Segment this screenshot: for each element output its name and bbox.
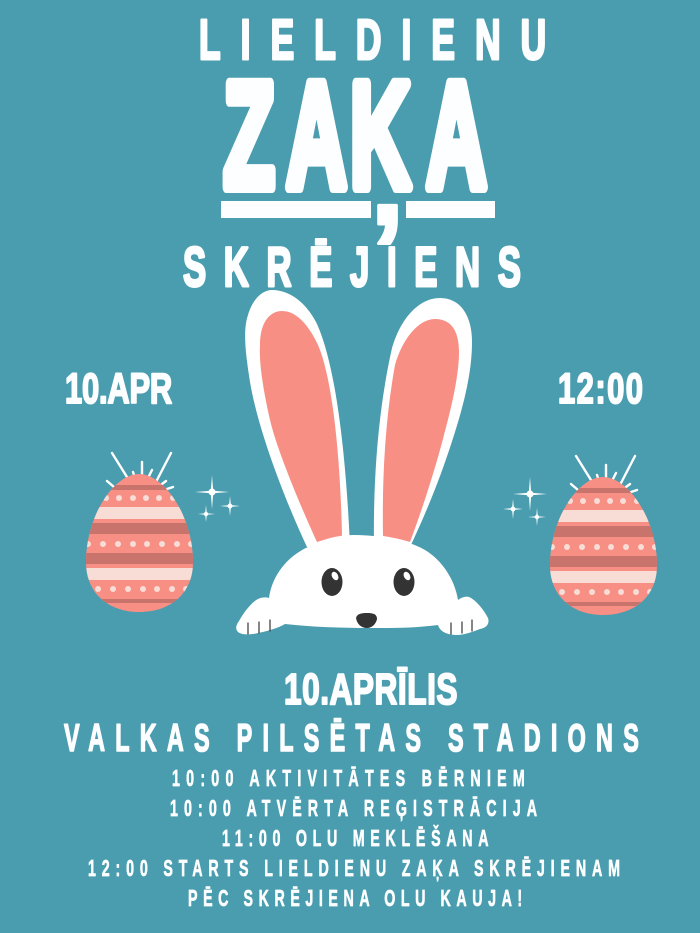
eyes (322, 568, 414, 596)
right ear (374, 298, 472, 547)
title: LIELDIENU: LIELDIENU (199, 9, 546, 72)
title underline with comma: , (370, 112, 405, 251)
egg rays (107, 453, 173, 489)
title: ZAKA: ZAKA (223, 51, 487, 219)
left ear (245, 290, 350, 547)
head and paws (236, 535, 489, 635)
schedule (88, 767, 620, 912)
icon: left egg (85, 453, 194, 612)
egg body (549, 477, 658, 615)
schedule line 1: 10:00 AKTIVITĀTES BĒRNIEM (172, 767, 525, 792)
title: SKRĒJIENS: SKRĒJIENS (183, 236, 521, 298)
nose (356, 613, 377, 628)
schedule line 2: 10:00 ATVĒRTA REĢISTRĀCIJA (170, 797, 537, 822)
claws (248, 620, 472, 634)
date label: 10.APR (65, 364, 172, 412)
icon: bunny (236, 290, 489, 635)
icon: right sparkles (503, 477, 547, 526)
title underline with comma (221, 112, 495, 251)
schedule line 4: 12:00 STARTS LIELDIENU ZAĶA SKRĒJIENAM (88, 857, 620, 882)
egg body (85, 474, 194, 612)
icon: right egg (549, 456, 658, 615)
time label: 12:00 (558, 364, 643, 412)
schedule line 5: PĒC SKRĒJIENA OLU KAUJA! (188, 887, 522, 912)
event date: 10.APRĪLIS (284, 665, 458, 714)
egg rays (571, 456, 637, 492)
schedule line 3: 11:00 OLU MEKLĒŠANA (222, 826, 489, 852)
icon: left sparkles (195, 475, 240, 522)
venue: VALKAS PILSĒTAS STADIONS (64, 716, 639, 759)
